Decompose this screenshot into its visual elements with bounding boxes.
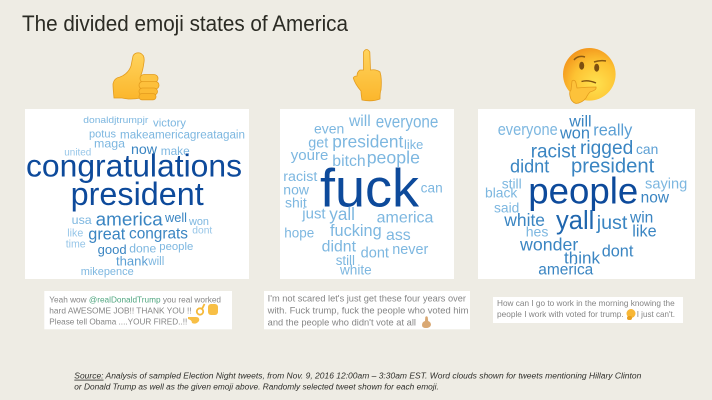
tweet: thumbs up: Yeah wow @realDonaldTrump you real worked (49, 294, 221, 304)
panel: thumbs up word cloud: victory (153, 118, 186, 130)
panel: middle finger word cloud: will (348, 113, 371, 130)
panel: thumbs up word cloud: thank (116, 254, 148, 269)
panel: thumbs up word cloud: will (147, 256, 164, 268)
panel: middle finger word cloud: just (301, 205, 326, 222)
panel: middle finger word cloud: now (283, 181, 310, 197)
panel: thinking face word cloud: think (564, 248, 600, 267)
panel: middle finger word cloud: get (308, 136, 328, 152)
panel: thinking face word cloud: now (641, 190, 670, 207)
panel: middle finger word cloud: white (339, 262, 372, 277)
panel: middle finger word cloud: can (421, 180, 443, 195)
panel: middle finger word cloud: everyone (376, 112, 438, 132)
panel: middle finger word cloud: racist (283, 169, 317, 185)
tweet: thumbs up: hard AWESOME JOB!! THANK YOU !! (49, 305, 192, 315)
icon: middle finger (353, 50, 381, 101)
tweet: middle finger: and the people who didn't vote at all (268, 318, 416, 328)
panel: middle finger word cloud: like (404, 137, 423, 152)
panel: thinking face word cloud: like (632, 223, 657, 241)
panel: thinking face word cloud: people (528, 170, 638, 211)
panel: thinking face word cloud: black (485, 186, 517, 201)
panel: thinking face word cloud: wonder (519, 234, 578, 254)
panel: thinking face word cloud: win (629, 210, 653, 227)
panel: thinking face word cloud: will (568, 114, 592, 131)
panel: middle finger word cloud: yall (329, 205, 355, 224)
panel: thinking face word cloud: hes (526, 224, 548, 240)
source note: Source: Analysis of sampled Election Night tweets, from Nov. 9, 2016 12:00am – 3:30am EST. Word clouds shown for tweets mentioning Hillary Clinton (74, 372, 642, 381)
panel: thumbs up word cloud: good (98, 242, 127, 257)
panel: thinking face word cloud: america (538, 261, 594, 278)
panel: thinking face word cloud: dont (602, 243, 634, 261)
panel: middle finger word cloud: didnt (322, 239, 357, 256)
panel: middle finger word cloud: never (392, 242, 429, 258)
panel: middle finger word cloud: hope (284, 225, 314, 240)
panel: middle finger word cloud: bitch (332, 153, 366, 170)
panel: thumbs up word cloud: maga (94, 137, 125, 151)
panel: middle finger word cloud: president (332, 132, 403, 152)
panel: thumbs up word cloud: makeamericagreatagain (120, 128, 245, 141)
panel: middle finger word cloud: still (336, 253, 355, 268)
panel: thumbs up word cloud: well (164, 210, 187, 225)
panel: thinking face word cloud (478, 109, 695, 279)
icon: thinking face (563, 48, 616, 104)
tweet: middle finger: with. Fuck trump, fuck the people who voted him (267, 306, 468, 316)
tweet: thumbs up: Please tell Obama ....YOUR FIRED..!! (49, 316, 187, 326)
tweet: middle finger (264, 291, 470, 329)
panel: thinking face word cloud: still (502, 175, 522, 191)
panel: middle finger word cloud: shit (285, 194, 307, 210)
panel: middle finger word cloud: even (314, 120, 344, 136)
source note (74, 372, 642, 391)
panel: thumbs up word cloud: make (161, 144, 190, 158)
panel: middle finger word cloud: america (377, 210, 434, 227)
tweet: middle finger: I'm not scared let's just get these four years over (268, 294, 466, 304)
panel: thumbs up word cloud: now (131, 142, 158, 158)
panel: middle finger word cloud: fuck (320, 159, 420, 219)
panel: thumbs up word cloud: united (64, 148, 91, 159)
panel: thumbs up word cloud: dont (192, 226, 212, 237)
panel: thumbs up word cloud: done (129, 242, 157, 256)
source note: or Donald Trump as well as the given emoji above. Randomly selected tweet shown for each emoji. (74, 382, 439, 391)
panel: thumbs up word cloud: won (188, 216, 209, 228)
panel: thumbs up word cloud: congrats (129, 225, 188, 242)
tweet: thinking face: I just can't. (637, 309, 675, 319)
panel: thumbs up word cloud: donaldjtrumpjr (83, 114, 148, 125)
panel: thinking face word cloud: can (636, 142, 658, 157)
panel: thumbs up word cloud: america (96, 209, 163, 230)
panel: thumbs up word cloud: like (67, 228, 83, 240)
panel: middle finger word cloud: people (367, 147, 420, 167)
panel: middle finger word cloud: dont (361, 245, 389, 261)
panel: thinking face word cloud: said (494, 200, 519, 215)
panel: thinking face word cloud: rigged (580, 138, 633, 159)
panel: thumbs up word cloud: mikepence (81, 266, 134, 278)
tweet: thumbs up (44, 291, 232, 329)
icon: thumbs up (113, 53, 159, 100)
panel: middle finger word cloud: youre (291, 147, 328, 164)
panel: thumbs up word cloud: congratulations (26, 148, 242, 184)
panel: thinking face word cloud: saying (645, 176, 687, 192)
panel: thinking face word cloud: everyone (498, 120, 558, 139)
panel: thinking face word cloud: yall (556, 207, 594, 235)
panel: thumbs up word cloud: president (71, 176, 204, 212)
panel: thinking face word cloud: white (503, 210, 545, 230)
panel: thumbs up word cloud: great (88, 225, 126, 243)
panel: thinking face word cloud: just (596, 212, 628, 234)
panel: thumbs up word cloud: people (159, 241, 193, 253)
tweet: thinking face: people I work with voted for trump. (497, 309, 624, 319)
tweet: thinking face (493, 297, 683, 323)
panel: thinking face word cloud: really (593, 122, 633, 140)
panel: thumbs up word cloud: potus (89, 128, 116, 140)
panel: thinking face word cloud: racist (531, 141, 577, 162)
panel: thinking face word cloud: didnt (510, 157, 549, 177)
tweet: thinking face: How can I go to work in the morning knowing the (497, 298, 675, 308)
panel: thinking face word cloud: won (559, 124, 590, 142)
panel: middle finger word cloud: ass (386, 227, 411, 244)
panel: thumbs up word cloud: time (66, 239, 86, 251)
panel: thumbs up word cloud (25, 109, 249, 279)
panel: thinking face word cloud: president (571, 156, 655, 178)
panel: thumbs up word cloud: usa (72, 213, 92, 227)
panel: middle finger word cloud: fucking (330, 222, 382, 240)
panel: middle finger word cloud (280, 109, 454, 279)
title: The divided emoji states of America (22, 11, 349, 36)
